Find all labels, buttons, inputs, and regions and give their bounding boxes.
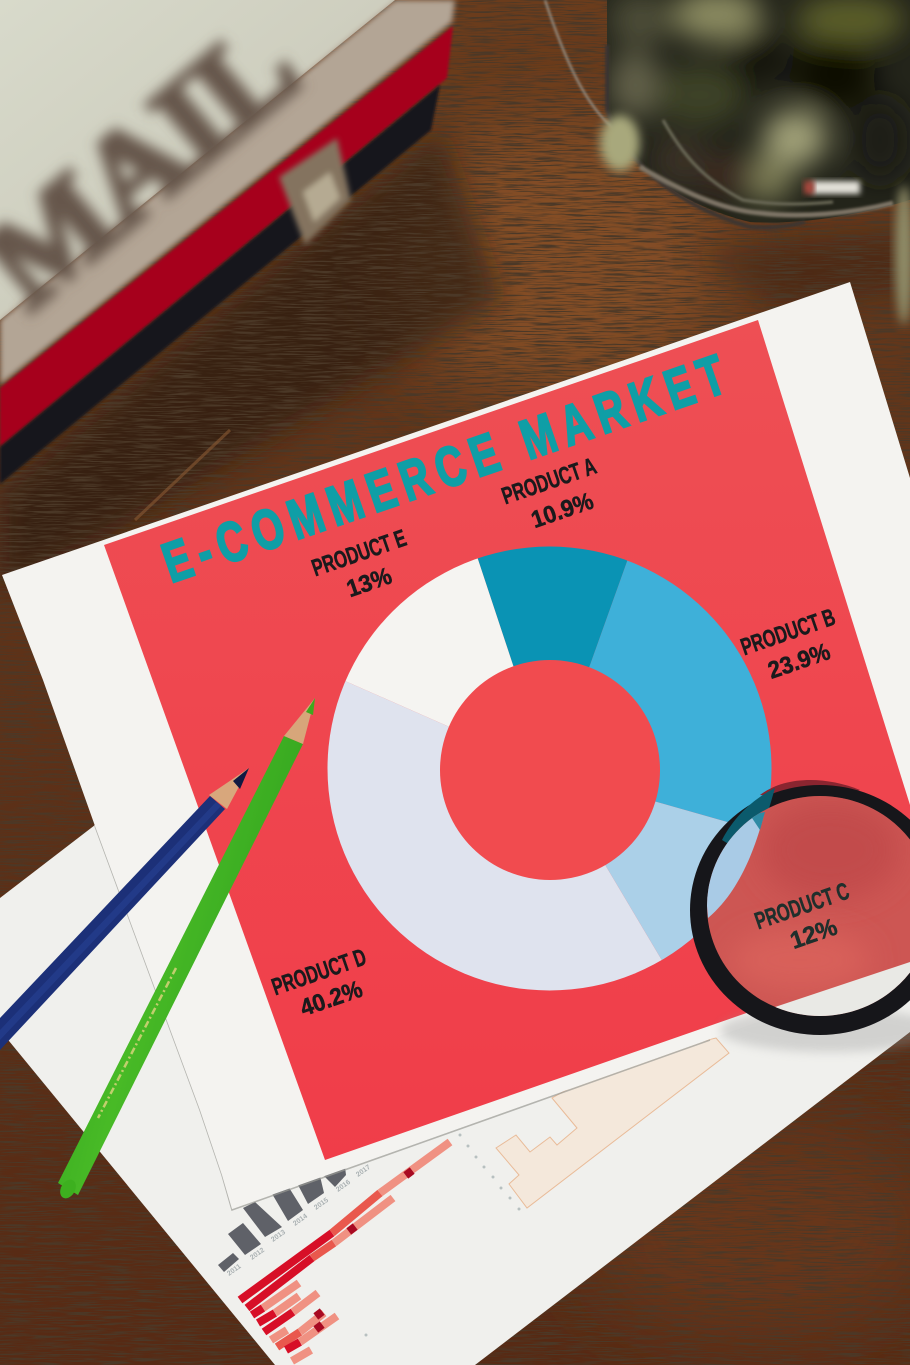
mail box <box>0 0 455 484</box>
box dark side <box>0 85 440 484</box>
year axis labels: 2013 <box>270 1229 287 1244</box>
axis ticks <box>364 1134 520 1336</box>
segment: product E <box>200 450 550 770</box>
lens shadow rim <box>760 780 860 800</box>
plant foliage <box>600 0 910 230</box>
label: product E: PRODUCT E <box>308 525 410 582</box>
label: product B <box>737 604 849 691</box>
label: product A: PRODUCT A <box>498 453 600 510</box>
year axis labels: 2016 <box>335 1179 352 1194</box>
glass bowl rim <box>545 0 893 228</box>
magnifying glass <box>690 780 910 1035</box>
label: product A <box>498 453 610 540</box>
year axis labels <box>226 1164 372 1278</box>
red horizontal bar chart <box>240 1142 450 1361</box>
label: product E: 13% <box>343 563 395 603</box>
lens interior <box>700 790 910 1030</box>
label: product C <box>751 878 863 964</box>
title: E-COMMERCE MARKET <box>155 344 733 595</box>
box lid band <box>0 0 455 385</box>
box red stripe <box>0 26 453 447</box>
segment: product A <box>460 500 649 770</box>
main print sheet <box>2 282 910 1210</box>
label: product C: PRODUCT C <box>751 878 853 935</box>
donut chart <box>200 450 900 1058</box>
donut centre <box>440 660 660 880</box>
year axis labels: 2012 <box>249 1247 266 1262</box>
blurred plant in glass bowl <box>545 0 910 325</box>
red poster area <box>104 320 910 1160</box>
frame reflection of blue segment <box>722 788 775 848</box>
sheet paper <box>2 282 910 1209</box>
lens shadow <box>720 1008 910 1052</box>
year axis labels: 2011 <box>226 1263 243 1278</box>
label: product D: 40.2% <box>297 976 366 1022</box>
year axis labels: 2017 <box>355 1164 372 1179</box>
lens frame <box>690 785 910 1035</box>
label: product E <box>308 525 420 612</box>
lower report sheet <box>0 800 910 1365</box>
segment: product D <box>200 617 720 1058</box>
peach area chart <box>496 1038 729 1208</box>
label: product D <box>268 944 379 1029</box>
year axis labels: 2015 <box>313 1197 330 1212</box>
pencil: green <box>57 698 315 1201</box>
dark red markers <box>313 1167 415 1333</box>
segment: product C <box>550 770 900 1058</box>
box metal latch <box>279 138 351 245</box>
label: product C: 12% <box>787 914 841 955</box>
label: product D: PRODUCT D <box>268 944 370 1001</box>
sheet paper <box>0 800 910 1365</box>
year axis labels: 2014 <box>292 1213 309 1228</box>
box lid face <box>0 0 395 320</box>
label: product A: 10.9% <box>528 488 597 534</box>
label: product B: PRODUCT B <box>737 604 839 661</box>
label: product B: 23.9% <box>765 638 834 685</box>
grey bar chart <box>218 1167 346 1272</box>
segment: product B <box>550 500 900 871</box>
pencil: blue <box>0 768 249 1050</box>
sheet edge shadow <box>95 826 710 1210</box>
